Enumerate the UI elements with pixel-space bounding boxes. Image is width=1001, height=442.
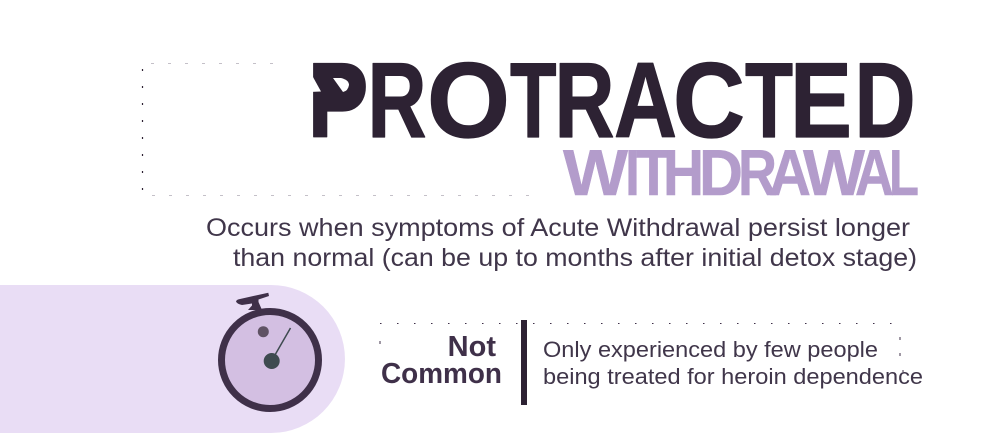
heading: Not Common — [381, 331, 502, 390]
title: PROTRACTED: R — [368, 40, 426, 160]
subtitle: WITHDRAWAL: T — [636, 136, 671, 209]
subtitle: WITHDRAWAL: R — [738, 136, 777, 209]
title: PROTRACTED: A — [614, 40, 677, 160]
subtitle: WITHDRAWAL: W — [803, 136, 866, 209]
divider bar — [521, 320, 527, 405]
title: PROTRACTED: O — [427, 40, 510, 160]
description text — [206, 214, 917, 272]
title: PROTRACTED: T — [745, 40, 793, 160]
subtitle: WITHDRAWAL: D — [699, 136, 743, 209]
heading: Not Common: Common — [381, 358, 502, 390]
title: PROTRACTED: T — [510, 40, 556, 160]
subtitle: WITHDRAWAL: W — [563, 136, 629, 209]
title: PROTRACTED — [308, 40, 916, 160]
note text — [543, 337, 923, 389]
title: PROTRACTED: C — [673, 40, 745, 160]
panel: stopwatch background — [0, 285, 345, 433]
description text: than normal (can be up to months after initial detox stage) — [233, 244, 917, 272]
subtitle: WITHDRAWAL: H — [663, 136, 704, 209]
title: PROTRACTED: E — [790, 40, 852, 160]
title: PROTRACTED: P — [308, 40, 368, 160]
subtitle: WITHDRAWAL: L — [889, 136, 919, 209]
subtitle: WITHDRAWAL — [563, 136, 919, 209]
title: PROTRACTED: R — [554, 40, 614, 160]
heading: Not Common: Not — [448, 331, 496, 363]
subtitle: WITHDRAWAL: A — [769, 136, 811, 209]
subtitle: WITHDRAWAL: A — [855, 136, 894, 209]
note text: being treated for heroin dependence — [543, 364, 923, 389]
note text: Only experienced by few people — [543, 337, 878, 362]
subtitle: WITHDRAWAL: I — [625, 136, 640, 209]
title: PROTRACTED: D — [854, 40, 916, 160]
description text: Occurs when symptoms of Acute Withdrawal persist longer — [206, 214, 910, 242]
icon: stopwatch — [222, 293, 318, 408]
